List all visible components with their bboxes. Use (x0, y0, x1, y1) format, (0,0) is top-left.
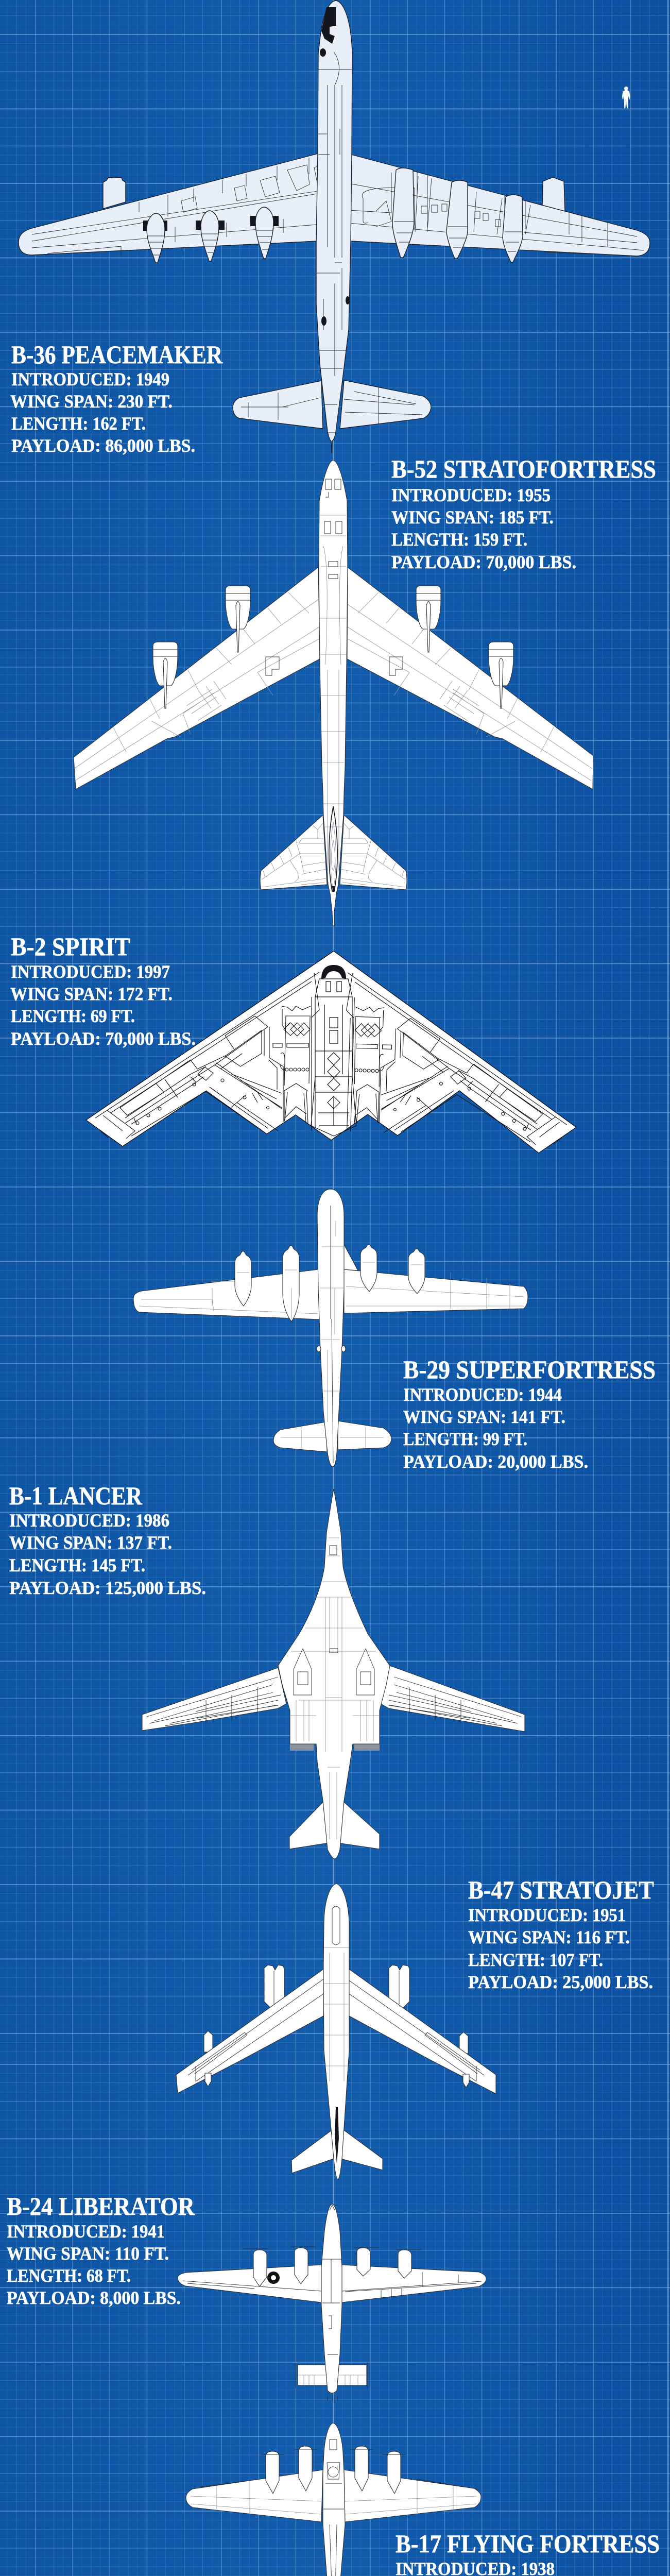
payload: PAYLOAD: 86,000 LBS. (11, 435, 195, 456)
plane: B-47 Stratojet (176, 1884, 496, 2179)
length: LENGTH: 145 FT. (9, 1555, 145, 1575)
wing span: WING SPAN: 116 FT. (468, 1927, 630, 1947)
specs: B-2 Spirit (10, 932, 196, 1049)
plane: B-24 Liberator (178, 2204, 486, 2401)
wing panel lines (74, 592, 592, 781)
tailplane (273, 1422, 327, 1452)
wings (176, 1967, 327, 2093)
fuselage (323, 2423, 345, 2576)
icon: human scale figure (622, 87, 630, 108)
plane: B-2 Spirit (86, 951, 576, 1153)
left engines (147, 213, 165, 263)
wing span: WING SPAN: 137 FT. (9, 1532, 172, 1553)
wingtip pod right (542, 177, 565, 235)
wings (186, 2470, 323, 2522)
fuselage (317, 1189, 344, 1467)
engines (253, 2248, 411, 2286)
introduced: INTRODUCED: 1955 (391, 485, 551, 505)
wing panel lines (32, 158, 644, 257)
introduced: INTRODUCED: 1986 (9, 1510, 169, 1531)
fuselage panel lines (320, 515, 347, 871)
length: LENGTH: 68 FT. (7, 2265, 131, 2286)
specs: B-24 Liberator (7, 2192, 195, 2308)
payload: PAYLOAD: 125,000 LBS. (9, 1578, 206, 1598)
specs: B-17 Flying Fortress (396, 2529, 660, 2576)
internal structure right (342, 973, 572, 1146)
wing span: WING SPAN: 141 FT. (403, 1406, 565, 1427)
left wing (19, 154, 334, 255)
introduced: INTRODUCED: 1951 (468, 1905, 626, 1925)
cockpit dark glazing (321, 7, 336, 44)
specs: B-52 Stratofortress (391, 454, 656, 572)
fuselage (323, 1884, 349, 2179)
wheel roundel (267, 2272, 280, 2284)
heading: B-1 LANCER (9, 1481, 143, 1510)
payload: PAYLOAD: 70,000 LBS. (11, 1028, 196, 1049)
plane: B-1 Lancer (142, 1489, 525, 1859)
introduced: INTRODUCED: 1941 (7, 2221, 165, 2242)
heading: B-2 SPIRIT (11, 932, 130, 961)
central body (311, 979, 356, 1136)
twin tail (298, 2365, 367, 2385)
plane: B-17 Flying Fortress (186, 2423, 481, 2576)
engine exhaust (290, 1741, 380, 1751)
length: LENGTH: 69 FT. (11, 1006, 135, 1026)
specs: B-36 Peacemaker (10, 340, 223, 456)
engines (266, 2446, 401, 2494)
cockpit arc (321, 965, 346, 979)
right engines (392, 168, 414, 258)
drag pods (205, 2073, 469, 2088)
wings (178, 2265, 321, 2302)
payload: PAYLOAD: 8,000 LBS. (7, 2287, 181, 2308)
body panel lines (290, 1538, 380, 1839)
tailplane (233, 381, 323, 429)
twin inner engines (264, 1965, 284, 2008)
specs: B-47 Stratojet (468, 1875, 654, 1992)
heading: B-36 PEACEMAKER (11, 340, 223, 369)
fuselage panel lines (317, 52, 352, 433)
wing span: WING SPAN: 110 FT. (7, 2243, 169, 2264)
tailplane right (340, 815, 407, 890)
wing root fillet (342, 1242, 358, 1270)
introduced: INTRODUCED: 1949 (11, 369, 169, 389)
payload: PAYLOAD: 70,000 LBS. (391, 552, 576, 572)
internal structure left (95, 972, 319, 1139)
length: LENGTH: 159 FT. (391, 529, 527, 550)
outer engines (204, 2031, 468, 2054)
wing span: WING SPAN: 230 FT. (10, 391, 173, 412)
left wing (74, 567, 320, 789)
propellers (261, 2449, 406, 2454)
introduced: INTRODUCED: 1944 (403, 1384, 562, 1405)
vertical fin lens (329, 806, 337, 891)
wingtip pod left (103, 177, 126, 209)
tailplane left (260, 815, 327, 890)
engines (235, 1251, 251, 1306)
propellers (244, 2247, 421, 2250)
body and glove (278, 1489, 390, 1859)
plane: B-52 Stratofortress (74, 460, 593, 926)
payload: PAYLOAD: 25,000 LBS. (468, 1972, 653, 1992)
fuselage (321, 2204, 342, 2393)
flying wing outline (86, 951, 576, 1153)
pylons (163, 602, 503, 708)
tailplanes (289, 1802, 329, 1849)
length: LENGTH: 107 FT. (468, 1950, 603, 1970)
dark engine cutouts (143, 216, 279, 231)
payload: PAYLOAD: 20,000 LBS. (403, 1451, 588, 1472)
fuselage (319, 460, 348, 926)
heading: B-24 LIBERATOR (7, 2192, 195, 2221)
right wing (347, 567, 593, 789)
wing span: WING SPAN: 185 FT. (391, 507, 554, 528)
engines (153, 586, 513, 686)
fuselage (316, 1, 352, 453)
wings (133, 1269, 320, 1319)
specs: B-1 Lancer (9, 1481, 206, 1598)
right wing (351, 155, 650, 256)
wing span: WING SPAN: 172 FT. (10, 984, 173, 1004)
tailplane (291, 2128, 334, 2173)
length: LENGTH: 99 FT. (403, 1429, 527, 1449)
swept wings (142, 1668, 286, 1731)
plane: B-29 Superfortress (133, 1189, 528, 1467)
specs: B-29 Superfortress (403, 1355, 656, 1472)
plane: B-36 Peacemaker (19, 1, 650, 453)
length: LENGTH: 162 FT. (11, 413, 146, 434)
introduced: INTRODUCED: 1997 (11, 961, 170, 982)
